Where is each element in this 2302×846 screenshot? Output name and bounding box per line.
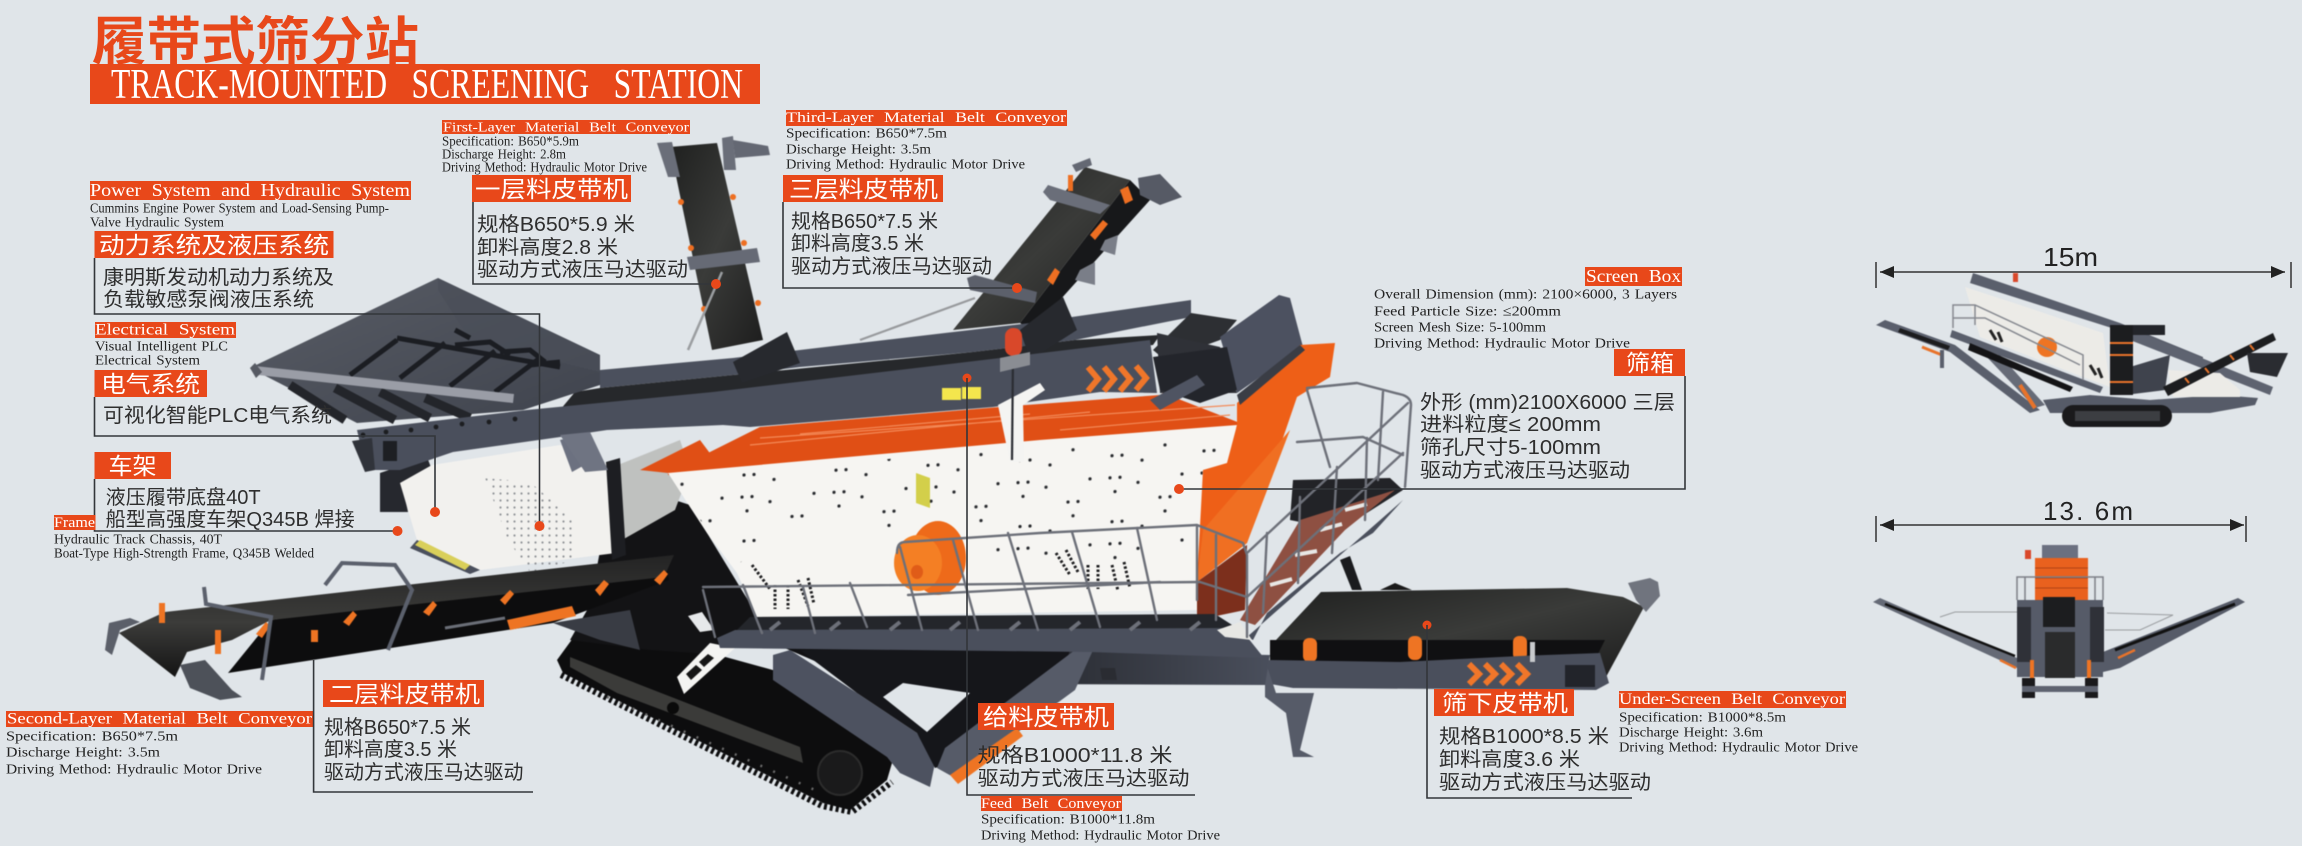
panel: screen box: Driving Method: Hydraulic Motor Drive xyxy=(1374,336,1630,352)
panel: under-screen belt conveyor: Driving Method: Hydraulic Motor Drive xyxy=(1619,740,1858,756)
engine housing xyxy=(380,435,690,574)
second-layer belt conveyor xyxy=(105,555,674,700)
panel: screen box: 外形 (mm)2100X6000 三层 xyxy=(1420,391,1675,414)
panel: screen box: Screen Mesh Size: 5-100mm xyxy=(1374,320,1546,336)
main beam xyxy=(352,295,1303,472)
panel: first-layer belt conveyor xyxy=(442,120,721,289)
panel: third-layer belt conveyor xyxy=(783,110,1067,293)
dimension: 15m xyxy=(1876,242,2291,288)
panel: third-layer belt conveyor: 三层料皮带机 xyxy=(789,176,938,202)
panel: third-layer belt conveyor: Discharge Height: 3.5m xyxy=(786,142,931,158)
panel: feed belt conveyor: 给料皮带机 xyxy=(983,704,1109,730)
panel: electrical system: Visual Intelligent PLC xyxy=(95,340,228,354)
panel: under-screen belt conveyor: 驱动方式液压马达驱动 xyxy=(1439,771,1651,794)
vibration springs xyxy=(752,550,1130,609)
panel: electrical system xyxy=(94,322,440,517)
panel: frame: 船型高强度车架Q345B 焊接 xyxy=(106,508,355,531)
dimension: 13.6m xyxy=(1876,496,2246,542)
panel: second-layer belt conveyor xyxy=(6,660,533,792)
panel: frame xyxy=(54,452,402,562)
panel: frame: Frame xyxy=(54,515,95,531)
panel: feed belt conveyor: Feed Belt Conveyor xyxy=(981,796,1121,812)
panel: under-screen belt conveyor: 卸料高度3.6 米 xyxy=(1439,748,1580,771)
panel: under-screen belt conveyor: Discharge Height: 3.6m xyxy=(1619,726,1763,740)
under-screen belt conveyor xyxy=(1265,578,1660,757)
panel: power system and hydraulic system: Power System and Hydraulic System xyxy=(90,180,410,200)
panel: first-layer belt conveyor: 驱动方式液压马达驱动 xyxy=(477,258,688,281)
undercarriage frame and arms xyxy=(570,480,1270,787)
panel: second-layer belt conveyor: 驱动方式液压马达驱动 xyxy=(324,761,524,784)
crawler track xyxy=(557,638,892,812)
panel: feed belt conveyor: 规格B1000*11.8 米 xyxy=(978,744,1172,767)
panel: power system and hydraulic system: Cummins Engine Power System and Load-Sensing Pump- xyxy=(90,202,389,216)
panel: feed belt conveyor: 驱动方式液压马达驱动 xyxy=(978,767,1190,790)
panel: power system and hydraulic system: 负载敏感泵阀液压系统 xyxy=(103,288,314,311)
panel: first-layer belt conveyor: 卸料高度2.8 米 xyxy=(477,236,618,259)
panel: feed belt conveyor: Specification: B1000*11.8m xyxy=(981,812,1155,828)
panel: second-layer belt conveyor: 二层料皮带机 xyxy=(329,681,480,707)
panel: first-layer belt conveyor: Discharge Height: 2.8m xyxy=(442,148,566,162)
panel: power system and hydraulic system: Valve Hydraulic System xyxy=(90,216,224,230)
panel: frame: 液压履带底盘40T xyxy=(106,486,261,509)
panel: screen box: 驱动方式液压马达驱动 xyxy=(1420,459,1630,482)
panel: screen box: 进料粒度≤ 200mm xyxy=(1420,413,1601,436)
panel: screen box xyxy=(1174,266,1685,494)
third-layer belt conveyor xyxy=(860,158,1182,340)
first-layer belt conveyor xyxy=(657,136,770,350)
panel: third-layer belt conveyor: 驱动方式液压马达驱动 xyxy=(791,255,992,278)
panel: screen box: Overall Dimension (mm): 2100×6000, 3 Layers xyxy=(1374,288,1677,302)
panel: third-layer belt conveyor: Driving Method: Hydraulic Motor Drive xyxy=(786,158,1025,172)
panel: first-layer belt conveyor: Specification: B650*5.9m xyxy=(442,134,579,150)
side view of machine xyxy=(1876,273,2288,427)
panel: second-layer belt conveyor: Second-Layer Material Belt Conveyor xyxy=(7,710,313,728)
panel: first-layer belt conveyor: First-Layer Material Belt Conveyor xyxy=(443,120,689,136)
panel: first-layer belt conveyor: 规格B650*5.9 米 xyxy=(477,213,635,236)
panel: screen box: Screen Box xyxy=(1586,266,1681,286)
panel: power system and hydraulic system xyxy=(90,180,544,531)
dimension: 15m: 15m xyxy=(2043,242,2098,272)
title: 履带式筛分站 xyxy=(92,14,419,72)
panel: second-layer belt conveyor: Driving Method: Hydraulic Motor Drive xyxy=(6,762,262,778)
panel: power system and hydraulic system: 康明斯发动机动力系统及 xyxy=(103,266,334,289)
panel: first-layer belt conveyor: 一层料皮带机 xyxy=(475,176,628,202)
panel: second-layer belt conveyor: Specification: B650*7.5m xyxy=(6,730,178,744)
dimension: 13.6m: 13. 6m xyxy=(2043,496,2133,526)
panel: electrical system: Electrical System xyxy=(95,354,200,368)
panel: screen box: 筛箱 xyxy=(1626,350,1674,376)
panel: feed belt conveyor xyxy=(962,374,1220,844)
panel: screen box: Feed Particle Size: ≤200mm xyxy=(1374,304,1561,320)
panel: under-screen belt conveyor: 规格B1000*8.5 米 xyxy=(1439,725,1609,748)
panel: under-screen belt conveyor: Under-Screen Belt Conveyor xyxy=(1619,691,1846,708)
stairs and platform xyxy=(1217,478,1403,640)
panel: second-layer belt conveyor: Discharge Height: 3.5m xyxy=(6,746,160,760)
panel: second-layer belt conveyor: 规格B650*7.5 米 xyxy=(324,716,471,739)
panel: feed belt conveyor: Driving Method: Hydraulic Motor Drive xyxy=(981,828,1220,844)
panel: frame: Boat-Type High-Strength Frame, Q345B Welded xyxy=(54,546,314,562)
panel: power system and hydraulic system: 动力系统及液压系统 xyxy=(99,232,329,258)
panel: under-screen belt conveyor: Specification: B1000*8.5m xyxy=(1619,710,1786,726)
upper rail and chutes xyxy=(560,297,1237,410)
panel: third-layer belt conveyor: 规格B650*7.5 米 xyxy=(791,210,938,233)
panel: under-screen belt conveyor: 筛下皮带机 xyxy=(1442,690,1568,716)
panel: screen box: 筛孔尺寸5-100mm xyxy=(1420,436,1601,459)
panel: third-layer belt conveyor: Specification: B650*7.5m xyxy=(786,126,947,142)
front view of machine xyxy=(1873,545,2245,698)
panel: electrical system: Electrical System xyxy=(95,322,236,338)
catwalk railing xyxy=(703,383,1411,637)
panel: second-layer belt conveyor: 卸料高度3.5 米 xyxy=(324,738,457,761)
panel: electrical system: 可视化智能PLC电气系统 xyxy=(103,404,332,427)
panel: frame: 车架 xyxy=(108,453,156,479)
hopper xyxy=(250,278,600,423)
catwalk deck xyxy=(717,614,1264,658)
panel: frame: Hydraulic Track Chassis, 40T xyxy=(54,532,222,548)
panel: third-layer belt conveyor: Third-Layer Material Belt Conveyor xyxy=(786,110,1066,126)
panel: under-screen belt conveyor xyxy=(1422,620,1858,798)
main machine illustration xyxy=(105,136,1660,812)
subtitle banner: TRACK-MOUNTED SCREENING STATION xyxy=(111,62,743,108)
panel: third-layer belt conveyor: 卸料高度3.5 米 xyxy=(791,232,924,255)
white step xyxy=(677,643,735,694)
panel: first-layer belt conveyor: Driving Method: Hydraulic Motor Drive xyxy=(442,160,647,176)
screen box xyxy=(640,328,1335,620)
panel: electrical system: 电气系统 xyxy=(101,371,200,397)
